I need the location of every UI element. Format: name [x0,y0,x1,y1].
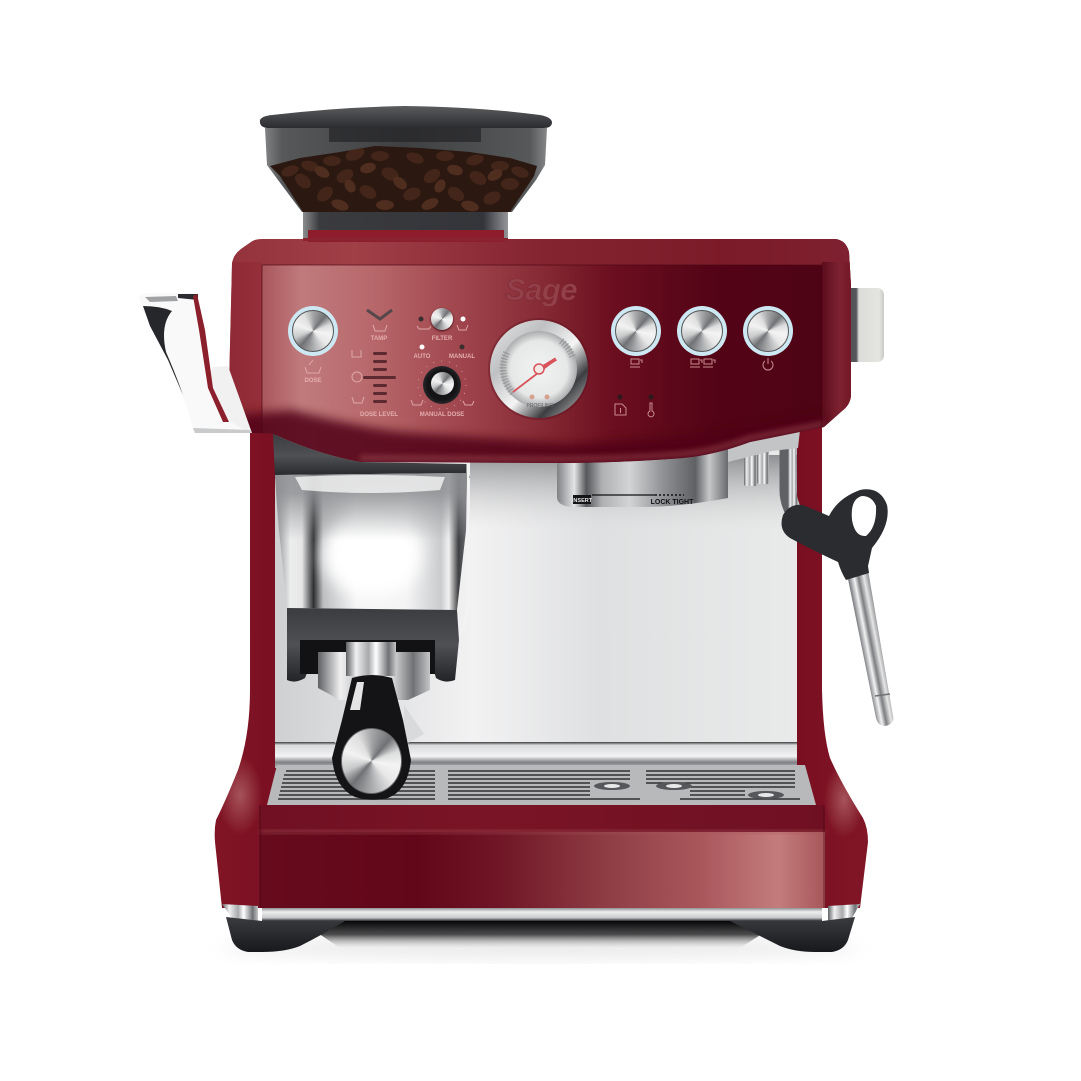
base front panel [260,805,825,908]
portafilter steel end cap [341,728,402,794]
filter selector knob [431,308,453,330]
group head: LOCK TIGHT [651,499,694,506]
cradle side rail [458,464,468,636]
control panel labels: MANUAL DOSE [420,412,464,418]
floor shadow [220,938,860,958]
drip tray back strip [275,742,797,768]
cradle dark collar and prongs [287,608,459,682]
red columns and flared base [215,420,868,908]
indicator lights [418,316,654,400]
grinder collar [303,212,508,242]
steam wand tube [847,570,893,726]
chrome dosing cup [275,473,467,610]
coffee beans [270,146,537,212]
Sage logo: Sage [505,272,577,307]
control panel labels: TAMP [371,336,387,342]
grinder lever [139,293,252,433]
feet [226,917,855,952]
single shot steel cap [615,310,657,352]
head left side panel [229,262,262,422]
hopper rear column [329,124,481,142]
under shadow [300,921,782,948]
shot and status icons [615,358,773,417]
portafilter handle [332,675,411,800]
base front lip [260,805,825,833]
machine head [229,239,851,463]
grinding cradle top [273,434,470,478]
portafilter fins [322,705,424,745]
double shot button [677,306,727,356]
drip tray grate [267,765,816,805]
control panel labels: AUTO [414,354,431,360]
pressure gauge [488,318,590,420]
portafilter basket [300,640,435,700]
control panel labels: DOSE [304,378,322,384]
stainless back panel [275,440,797,744]
head front face [228,239,851,463]
steam wand handle [782,489,888,580]
head lower shadow [244,404,824,463]
control panel labels: MANUAL [449,354,475,360]
dose button [288,306,338,356]
dose steel cap [292,310,334,352]
group head: INSERT [572,498,593,504]
espresso machine illustration [143,239,894,960]
group head [557,445,728,507]
group head spouts [728,430,800,486]
steam wand pipe [788,435,798,518]
power steel cap [747,310,789,352]
head lower edge highlight [360,424,824,459]
control panel labels: FILTER [432,336,453,342]
gauge needle [513,360,555,392]
control panel labels: DOSE LEVEL [360,412,398,418]
right side button [851,288,884,362]
hopper lid [260,106,552,128]
lower chrome strip [222,904,860,921]
bean hopper [260,106,552,242]
single shot button [611,306,661,356]
power button [743,306,793,356]
head top band [232,239,850,265]
manual dose knob [423,366,461,404]
lever chrome bar [190,366,252,433]
control panel labels [304,336,475,418]
small cup icons [305,325,474,405]
head right side panel [822,262,851,428]
manual dose steel cap [431,372,454,395]
hopper glass [265,128,547,212]
tamp chevron icon [367,310,392,319]
dose knob ticks [418,361,466,409]
double shot steel cap [681,310,723,352]
pressure gauge: PROFILING [527,403,554,409]
dose level bars [363,352,396,403]
